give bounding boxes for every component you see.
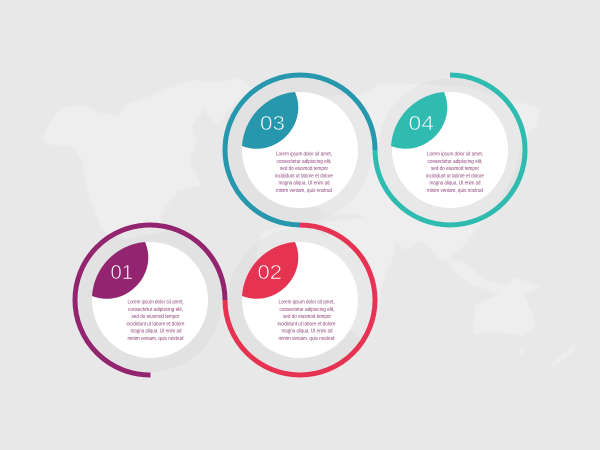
arc: step 03 ring — [225, 75, 375, 225]
grey halo ring — [235, 235, 365, 365]
body text — [278, 300, 336, 342]
body text — [126, 300, 184, 342]
leaf badge — [242, 92, 298, 149]
body text: incididunt ut labore et dolore — [126, 321, 184, 327]
white disc — [392, 92, 508, 208]
number 04: 04 — [408, 113, 434, 135]
body text: magna aliqua. Ut enim ad — [282, 328, 332, 334]
body text: sed do eiusmod tempor — [132, 314, 180, 320]
body text: minim veniam, quis nostrud — [427, 188, 483, 194]
body text: incididunt ut labore et dolore — [426, 173, 484, 179]
body text: magna aliqua. Ut enim ad — [430, 180, 480, 186]
body text: sed do eiusmod tempor — [431, 166, 479, 172]
body text: Lorem ipsum dolor sit amet, — [276, 152, 332, 158]
leaf badge — [92, 242, 148, 299]
body text: minim veniam, quis nostrud — [278, 336, 334, 342]
body text: consectetur adipiscing elit, — [280, 307, 335, 313]
body text: consectetur adipiscing elit, — [428, 159, 483, 165]
body text: incididunt ut labore et dolore — [278, 321, 336, 327]
grey halo ring — [235, 85, 365, 215]
leaf badge — [391, 92, 447, 149]
panel: step 04 — [385, 85, 515, 215]
body text — [426, 152, 484, 194]
body text — [275, 152, 333, 194]
grey halo ring — [85, 235, 215, 365]
arc: step 01 ring — [75, 225, 225, 375]
arc: step 04 ring — [375, 75, 525, 225]
body text: Lorem ipsum dolor sit amet, — [128, 300, 184, 306]
number 01: 01 — [110, 262, 133, 284]
body text: sed do eiusmod tempor — [280, 166, 328, 172]
body text: minim veniam, quis nostrud — [128, 336, 184, 342]
white disc — [92, 242, 208, 358]
body text: consectetur adipiscing elit, — [276, 159, 332, 165]
body text: minim veniam, quis nostrud — [276, 188, 332, 194]
leaf badge — [242, 242, 298, 299]
number 03: 03 — [260, 113, 285, 135]
panel: step 03 — [235, 85, 365, 215]
body text: magna aliqua. Ut enim ad — [130, 328, 182, 334]
body text: sed do eiusmod tempor — [283, 314, 331, 320]
body text: magna aliqua. Ut enim ad — [278, 180, 330, 186]
panel: step 02 — [235, 235, 365, 365]
body text: Lorem ipsum dolor sit amet, — [427, 152, 483, 158]
white disc — [242, 92, 358, 208]
white disc — [242, 242, 358, 358]
world map background — [42, 78, 575, 367]
body text: consectetur adipiscing elit, — [128, 307, 183, 313]
number 02: 02 — [258, 262, 282, 284]
body text: Lorem ipsum dolor sit amet, — [278, 300, 335, 306]
arc: step 02 ring — [225, 225, 375, 375]
grey halo ring — [385, 85, 515, 215]
body text: incididunt ut labore et dolore — [275, 173, 333, 179]
panel: step 01 — [85, 235, 215, 365]
